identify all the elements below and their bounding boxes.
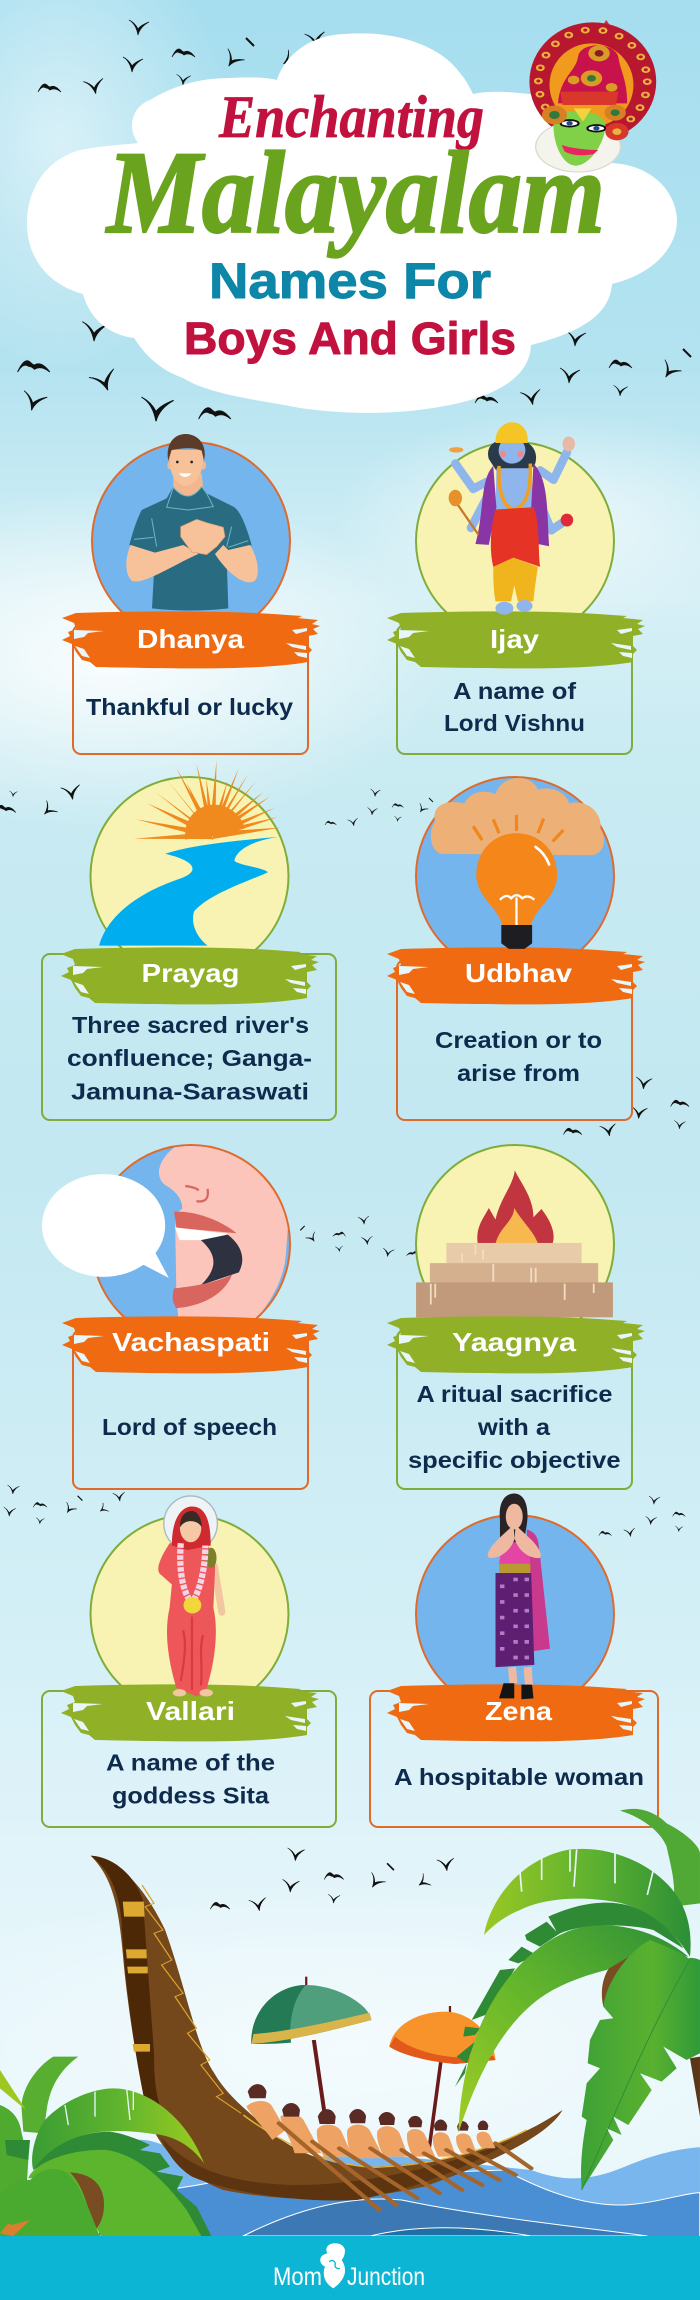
icon: thankful man [126, 434, 258, 610]
description: A name of [453, 678, 576, 704]
cloud [27, 33, 677, 413]
banner [387, 1316, 645, 1373]
description: A name of the [106, 1750, 275, 1776]
oars [279, 2123, 531, 2210]
description box [397, 960, 632, 1120]
card: Ijay [387, 422, 645, 754]
description: confluence; Ganga- [67, 1045, 312, 1071]
sea waves [98, 2140, 700, 2237]
circle [92, 442, 290, 640]
description [444, 678, 585, 736]
circle [90, 777, 288, 975]
banner [387, 1684, 645, 1741]
icon: sun and river [99, 761, 280, 946]
snake boat [91, 1856, 562, 2200]
description: arise from [457, 1060, 580, 1086]
description: Lord Vishnu [444, 710, 585, 736]
name: Zena [485, 1696, 553, 1726]
description box [73, 1330, 308, 1489]
scene: snake boat race [0, 1809, 700, 2237]
logo: wordmark Junction: Junction [347, 2263, 425, 2291]
name: Yaagnya [452, 1327, 577, 1357]
icon: woman in namaste pose [487, 1493, 550, 1699]
card: Zena [370, 1493, 658, 1827]
card: Udbhav [387, 777, 645, 1120]
circle [92, 1145, 290, 1343]
description box [42, 954, 336, 1120]
description box [42, 1691, 336, 1827]
description: with a [477, 1414, 550, 1440]
palm tree: right [455, 1809, 700, 2190]
banner [387, 947, 645, 1004]
title line: Enchanting: Enchanting [218, 84, 484, 150]
description [106, 1750, 275, 1808]
icon: goddess Sita [158, 1496, 222, 1697]
card: Vachaspati [42, 1139, 320, 1489]
icon: kathakali mask [529, 20, 656, 172]
title [105, 84, 605, 364]
icon: sacrificial fire altar [416, 1170, 613, 1317]
description: Lord of speech [102, 1414, 277, 1440]
title line: Names For: Names For [209, 253, 491, 309]
logo: wordmark Mom: Mom [273, 2263, 322, 2291]
banner [62, 611, 320, 668]
circle [90, 1515, 288, 1713]
card: Yaagnya [387, 1145, 645, 1489]
banner [62, 1316, 320, 1373]
banner [387, 611, 645, 668]
description box [397, 1330, 632, 1489]
description: specific objective [408, 1447, 620, 1473]
description: A ritual sacrifice [416, 1381, 612, 1407]
description: A hospitable woman [394, 1764, 644, 1790]
circle [416, 1145, 614, 1343]
logo: mother and child icon [320, 2243, 345, 2288]
circle [416, 442, 614, 640]
rowers [246, 2084, 496, 2158]
title line: Boys And Girls: Boys And Girls [184, 313, 516, 364]
name: Udbhav [465, 958, 573, 988]
description: Creation or to [435, 1027, 602, 1053]
logo: MomJunction [273, 2243, 425, 2291]
description box [73, 625, 308, 754]
description box [370, 1691, 658, 1827]
circle [416, 1515, 614, 1713]
umbrella: orange [389, 2006, 496, 2153]
description [67, 1012, 312, 1104]
description: goddess Sita [112, 1782, 269, 1808]
icon: light bulb and idea cloud [431, 778, 604, 949]
description: Three sacred river's [72, 1012, 309, 1038]
description: Thankful or lucky [86, 694, 293, 720]
title line: Malayalam: Malayalam [105, 127, 605, 258]
footer band [0, 2236, 700, 2300]
palm tree: left [0, 2057, 212, 2237]
name: Vallari [146, 1696, 235, 1726]
umbrella: green [251, 1977, 371, 2113]
description [435, 1027, 602, 1086]
description box [397, 625, 632, 754]
name: Vachaspati [112, 1327, 270, 1357]
name: Dhanya [137, 624, 245, 654]
circle [416, 777, 614, 975]
description [408, 1381, 620, 1473]
card: Dhanya [62, 434, 320, 754]
card: Prayag [42, 761, 336, 1120]
description: Jamuna-Saraswati [71, 1078, 309, 1104]
icon: speaking mouth and speech bubble [42, 1139, 295, 1323]
icon: Lord Vishnu [449, 422, 575, 615]
boat, umbrellas and sea [91, 1856, 700, 2237]
name: Prayag [142, 958, 240, 988]
banner [61, 1684, 319, 1741]
name: Ijay [490, 624, 540, 654]
banner [61, 947, 319, 1004]
card: Vallari [42, 1496, 336, 1827]
